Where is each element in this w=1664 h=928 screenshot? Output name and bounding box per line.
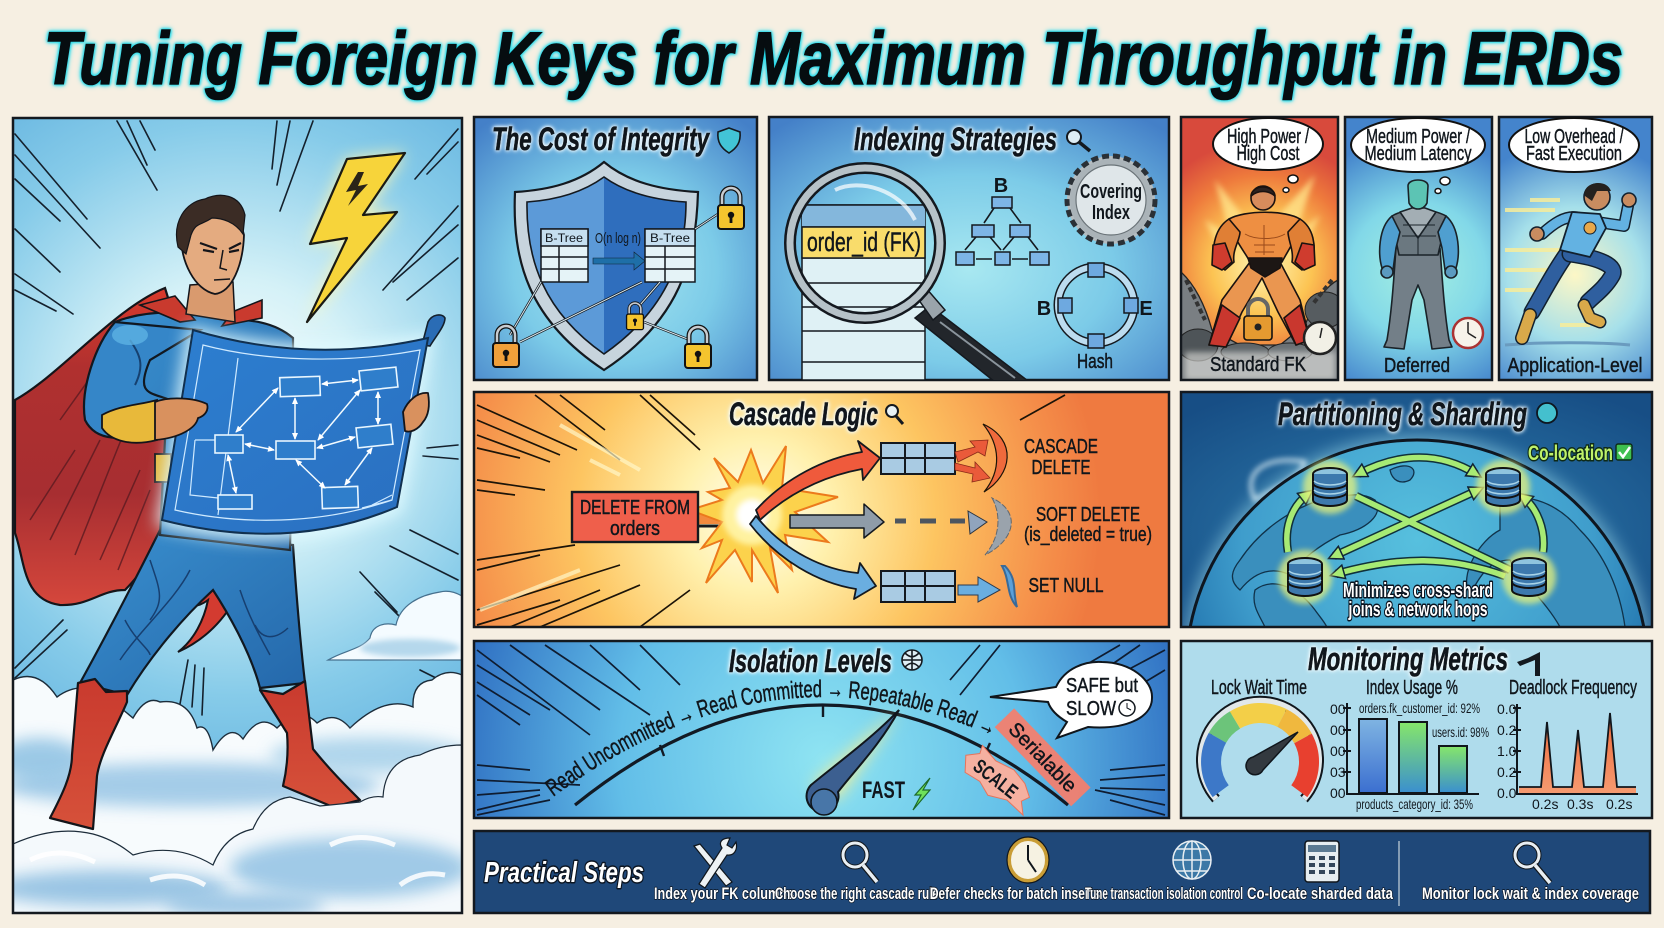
arc: soft delete xyxy=(985,498,1011,555)
needle xyxy=(807,710,899,815)
index usage chart: products_category_id: 35% xyxy=(1356,796,1473,812)
bubble: Medium Latency xyxy=(1364,143,1472,165)
table left xyxy=(541,229,588,282)
deadlock chart: 1.0 xyxy=(1497,743,1517,759)
serializable tag: Serialable xyxy=(1004,718,1081,797)
deadlock chart: 0.0 xyxy=(1497,785,1517,801)
heading: The Cost of Integrity xyxy=(492,121,711,157)
panel: application-level xyxy=(1499,117,1652,380)
collar xyxy=(140,296,262,326)
label: Application-Level xyxy=(1508,355,1642,377)
frame: isolation xyxy=(474,641,1169,818)
lightning bolt xyxy=(307,153,405,322)
deadlock chart: 0.0 xyxy=(1497,701,1517,717)
speed lines xyxy=(15,121,458,715)
head xyxy=(177,195,245,322)
index usage chart: users.id: 98% xyxy=(1432,724,1489,740)
deadlock chart: 0.2 xyxy=(1497,722,1517,738)
complexity label: O(n log n) xyxy=(595,230,641,247)
child table 1 xyxy=(881,443,955,474)
figure: strong hero xyxy=(1209,186,1315,347)
labels xyxy=(1024,436,1152,597)
label: Deferred xyxy=(1384,355,1450,377)
scale burst xyxy=(955,741,1042,820)
deadlock chart: 0.3s xyxy=(1567,796,1593,812)
index usage chart: 00 xyxy=(1330,785,1346,801)
badge: covering index xyxy=(1067,156,1155,244)
heading: Practical Steps xyxy=(484,857,644,889)
panel: cascade logic xyxy=(474,392,1169,627)
divider xyxy=(1398,841,1400,906)
icon: calculator xyxy=(1305,841,1339,882)
blueprint xyxy=(156,315,445,541)
bubble xyxy=(1351,118,1485,172)
arrow: set null xyxy=(750,516,876,599)
icon: globe xyxy=(1173,841,1211,879)
panel: superhero with blueprint xyxy=(0,118,470,917)
frame: partitioning xyxy=(1181,392,1652,627)
small red arrows xyxy=(955,440,990,482)
speed streaks xyxy=(1505,200,1590,325)
labels: SOFT DELETE xyxy=(1036,504,1140,526)
magnifier xyxy=(790,168,1032,386)
clock xyxy=(1453,318,1483,348)
panel: isolation levels xyxy=(475,642,1168,817)
globe xyxy=(1182,426,1651,626)
index usage chart: orders.fk_customer_id: 92% xyxy=(1359,700,1480,716)
gauge xyxy=(1201,677,1319,799)
label: order_id: order_id (FK) xyxy=(807,227,921,257)
heading: Isolation Levels xyxy=(729,643,892,679)
badge: covering index: Covering xyxy=(1080,181,1142,203)
deadlock chart: 0.2s xyxy=(1606,796,1632,812)
small blue arrow xyxy=(958,577,1000,602)
table with highlighted row xyxy=(802,205,925,380)
serializable tag xyxy=(995,708,1091,806)
b-tree diagram: B xyxy=(994,175,1008,197)
panel: indexing strategies xyxy=(769,117,1169,386)
icon: globe dot xyxy=(1537,403,1557,423)
labels: (is_deleted = true) xyxy=(1024,524,1152,546)
lock connectors xyxy=(510,214,718,342)
note xyxy=(1343,580,1493,621)
boots xyxy=(50,679,360,829)
figure: calm hero xyxy=(1380,180,1458,349)
level labels along arc: Read Uncommitted → Read Committed → Repeatable Read → xyxy=(544,679,991,796)
labels: SET NULL xyxy=(1028,575,1104,597)
deadlock chart: 0.2 xyxy=(1497,764,1517,780)
heading: Partitioning & Sharding xyxy=(1278,396,1527,432)
hash ring: E xyxy=(1139,298,1153,320)
panel: practical steps xyxy=(474,831,1650,913)
delete box: DELETE FROM xyxy=(580,497,690,519)
badge: covering index: Index xyxy=(1092,202,1130,224)
connector bars xyxy=(698,508,735,526)
index usage chart xyxy=(1330,677,1489,812)
note: joins & network hops xyxy=(1348,599,1488,621)
speech bubble: SAFE but xyxy=(1066,675,1138,697)
step labels: Defer checks for batch inserts xyxy=(930,884,1100,903)
panel frame: hero xyxy=(13,118,462,913)
heading: Cascade Logic xyxy=(729,396,878,432)
cape xyxy=(15,288,234,652)
panel: standard FK xyxy=(1178,117,1345,380)
deadlock chart xyxy=(1497,677,1638,812)
explosion xyxy=(690,446,838,593)
step labels: Tune transaction isolation control xyxy=(1085,884,1243,903)
step labels: Choose the right cascade rules xyxy=(775,884,945,903)
icon: shield small xyxy=(718,128,740,153)
legs xyxy=(80,530,305,695)
arc: set null xyxy=(1002,566,1017,607)
icon: tool xyxy=(1517,652,1540,676)
stopwatch xyxy=(1304,322,1336,354)
index usage chart: 00 xyxy=(1330,701,1346,717)
table left: B-Tree xyxy=(545,231,583,245)
heading: Monitoring Metrics xyxy=(1308,641,1508,677)
speech bubble: SLOW xyxy=(1066,698,1116,720)
back clouds xyxy=(14,672,461,864)
hash ring: Hash xyxy=(1077,351,1113,373)
bubble xyxy=(1509,118,1639,172)
step labels: Index your FK columns xyxy=(654,884,794,903)
panel: the cost of integrity xyxy=(474,117,757,380)
shard links xyxy=(1287,458,1544,576)
rubble and chains xyxy=(1178,272,1345,380)
arc: cascade xyxy=(983,424,1007,492)
fast label: FAST xyxy=(862,777,905,804)
icon: magnifier xyxy=(843,843,877,882)
bubble: High Power / xyxy=(1227,126,1309,148)
thought dots xyxy=(1288,175,1298,183)
child table 2 xyxy=(881,571,955,602)
icon: wrench xyxy=(694,838,737,888)
hash ring: B xyxy=(1037,298,1051,320)
lock xyxy=(1248,299,1268,318)
scale arc xyxy=(575,705,1068,805)
hash ring xyxy=(1037,263,1153,373)
icon: globe xyxy=(902,650,922,670)
scale burst: SCALE xyxy=(969,755,1022,803)
figure: runner xyxy=(1522,183,1636,338)
icon: small magnifier xyxy=(1067,130,1090,151)
heading: Indexing Strategies xyxy=(854,121,1057,157)
table right: B-Tree xyxy=(650,231,690,245)
thought dots xyxy=(1435,177,1450,194)
panel: partitioning and sharding xyxy=(1182,393,1651,626)
index usage chart: 00 xyxy=(1330,743,1346,759)
arrow xyxy=(593,252,645,270)
index usage chart: Index Usage % xyxy=(1366,677,1458,699)
step labels xyxy=(654,884,1639,903)
deadlock chart: 0.2s xyxy=(1532,796,1558,812)
panel: monitoring metrics xyxy=(1181,641,1652,818)
label: Standard FK xyxy=(1210,354,1307,376)
database nodes xyxy=(1278,460,1556,604)
panel: deferred xyxy=(1345,117,1492,380)
icon: magnifier 2 xyxy=(1515,843,1550,883)
labels: CASCADE xyxy=(1024,436,1098,458)
right cloud xyxy=(328,591,462,660)
hands xyxy=(155,393,429,440)
front clouds xyxy=(14,744,461,866)
torso and arm xyxy=(84,312,293,550)
b-tree diagram xyxy=(956,175,1049,265)
labels: DELETE xyxy=(1032,457,1090,479)
lock icons xyxy=(493,188,744,368)
bubble: Fast Execution xyxy=(1526,143,1622,165)
delete box: orders xyxy=(610,518,660,540)
index usage chart: 03 xyxy=(1330,764,1346,780)
arrow: cascade xyxy=(756,441,880,520)
speech bubble xyxy=(990,662,1152,738)
icon: search xyxy=(886,405,903,424)
bubble xyxy=(1213,118,1323,170)
step labels: Co-locate sharded data xyxy=(1247,884,1393,903)
note: Minimizes cross-shard xyxy=(1343,580,1493,602)
bubble: Medium Power / xyxy=(1366,126,1470,148)
gauge: Lock Wait Time xyxy=(1211,677,1307,699)
index usage chart: 00 xyxy=(1330,722,1346,738)
co-location tag: Co-location xyxy=(1528,442,1613,465)
bubble: High Cost xyxy=(1236,143,1300,165)
shield xyxy=(515,162,698,370)
frame: cascade xyxy=(474,392,1169,627)
arrow: soft delete xyxy=(790,504,987,538)
table right xyxy=(645,229,695,282)
belt and cuff xyxy=(102,400,171,482)
bubble: Low Overhead / xyxy=(1524,126,1624,148)
icon: clock xyxy=(1007,837,1049,883)
delete box xyxy=(572,492,698,542)
